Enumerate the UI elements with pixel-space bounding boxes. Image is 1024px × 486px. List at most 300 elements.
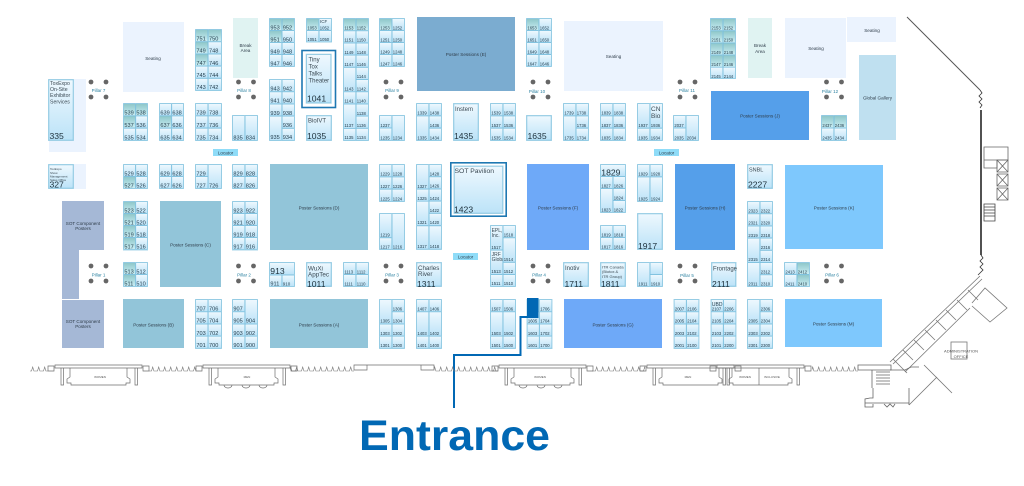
booth block 1153-1134: 1144 <box>357 74 366 79</box>
break area right: Break <box>754 43 767 48</box>
booth 2227 SNBL: SNBL <box>749 168 763 174</box>
poster sessions F: Poster Sessions (F) <box>538 206 579 210</box>
pillar 11 <box>678 80 697 99</box>
booth block 1605-1700 with highlighted booth <box>526 299 552 349</box>
booth block 923-916 <box>232 201 258 250</box>
booth block 2305-2300: 2304 <box>761 319 771 324</box>
booth block 1153-1134 <box>343 18 369 141</box>
booth block 1929-1924 <box>637 164 663 202</box>
booth block 913-910 <box>269 262 295 287</box>
poster sessions J <box>711 91 809 140</box>
booth block 523-516 <box>123 201 148 250</box>
booth block 539-534: 536 <box>136 123 146 129</box>
pillar 1 <box>89 264 108 283</box>
booth block 2323-2310: 2318 <box>761 233 771 238</box>
booth block 751-742: 750 <box>209 36 218 42</box>
women's restroom centre: WOMEN <box>534 375 546 379</box>
booth block 2153-2144 <box>710 18 736 79</box>
booth block 923-916: 918 <box>246 232 255 238</box>
booth block 2323-2310: 2316 <box>761 245 771 250</box>
booth block 1653-1646: 1652 <box>540 25 550 30</box>
booth 335 on-site exhibitor services <box>48 79 86 152</box>
booth block 1253-1246 <box>379 18 405 67</box>
poster sessions E <box>417 17 515 91</box>
poster sessions K: Poster Sessions (K) <box>814 206 855 210</box>
booth block 529-526: 528 <box>136 171 146 177</box>
pillar 1: Pillar 1 <box>92 272 106 278</box>
poster sessions D: Poster Sessions (D) <box>299 206 340 210</box>
booth block 923-916: 917 <box>233 244 243 250</box>
route arrow to entrance <box>454 317 528 408</box>
highlighted booth <box>527 298 538 318</box>
poster sessions H: Poster Sessions (H) <box>685 206 726 210</box>
booth block 1153-1134: 1150 <box>357 38 366 43</box>
booth block 1153-1134: 1136 <box>357 123 366 128</box>
booth block 1219-1216 <box>379 213 405 250</box>
booth block 1407-1400: 1406 <box>430 306 440 312</box>
pillar 10: Pillar 10 <box>529 89 546 94</box>
booth block 2437-2434: 2436 <box>835 123 845 128</box>
booth block 1237-1234: 1234 <box>393 135 403 140</box>
poster sessions E: Poster Sessions (E) <box>446 52 487 57</box>
diagonal offices <box>890 276 1007 405</box>
booth 1711 Inotiv: Inotiv <box>565 266 579 272</box>
booth block 1327-1418: 1420 <box>430 220 440 225</box>
booth block 523-516: 518 <box>136 232 146 238</box>
booth block 943-934: 936 <box>283 123 292 129</box>
booth block 1113-1110: 1110 <box>357 281 366 286</box>
booth block 751-742 <box>195 29 222 91</box>
booth block 1113-1110: 1112 <box>357 269 366 274</box>
break area left: Area <box>241 48 251 53</box>
booth block 523-516: 516 <box>136 244 146 250</box>
booth block 1911-1910: 1911 <box>638 281 648 286</box>
booth block EPL and JRF Global 1517-1510: EPL, <box>492 228 502 234</box>
booth block 2323-2310: 2323 <box>748 208 758 213</box>
booth block 953-946: 948 <box>283 49 292 55</box>
women's restroom centre <box>492 365 593 388</box>
booth block 2437-2434: 2434 <box>835 135 845 140</box>
booth block 523-516: 523 <box>124 208 134 214</box>
booth block 1937-1934 CN Bio: 1936 <box>651 123 661 128</box>
booth block 1507-1500: 1503 <box>491 331 501 336</box>
booth block 2107-2200: 2202 <box>724 331 734 336</box>
booth block 707-700: 707 <box>196 306 206 312</box>
booth block 1507-1500: 1500 <box>504 343 514 348</box>
booth block 739-734: 739 <box>196 111 206 117</box>
booth 2111 Frontage <box>711 262 738 289</box>
SOT component posters lower: SOT Component <box>66 319 101 324</box>
booth block 1229-1224: 1225 <box>380 196 390 201</box>
booth block 2107-2200: 2107 <box>712 306 722 312</box>
pillar 4 <box>531 264 550 283</box>
booth block 1153-1134: 1147 <box>344 62 354 67</box>
booth block 1653-1646 <box>526 18 552 67</box>
booth block 1153-1134: 1143 <box>344 86 354 91</box>
booth block 1739-1734: 1739 <box>564 111 574 116</box>
booth block 707-700 <box>195 299 222 349</box>
booth block 629-626: 628 <box>172 171 182 177</box>
pillar 6: Pillar 6 <box>825 272 839 278</box>
booth block 523-516: 519 <box>124 232 134 238</box>
poster sessions A: Poster Sessions (A) <box>299 322 340 328</box>
poster sessions G: Poster Sessions (G) <box>592 322 634 328</box>
booth block 1327-1418: 1418 <box>430 244 440 249</box>
booth block 1153-1134: 1141 <box>344 99 354 104</box>
booth block 2323-2310: 2310 <box>761 281 771 286</box>
booth block 1339-1434: 1434 <box>430 135 440 140</box>
booth block 1053-1050: ICF <box>320 19 328 24</box>
pillar 9 <box>384 80 403 99</box>
pillar 9: Pillar 9 <box>385 88 399 93</box>
booth block 1653-1646: 1646 <box>540 61 550 66</box>
booth 1917 <box>637 213 663 251</box>
booth block 513-510: 512 <box>136 269 146 275</box>
poster sessions M <box>785 299 882 347</box>
booth block 1153-1134: 1140 <box>357 99 366 104</box>
booth block 729-726: 727 <box>196 183 206 189</box>
booth block 751-742: 744 <box>209 73 218 79</box>
booth block 1605-1700 with highlighted booth: 1702 <box>540 331 550 336</box>
booth block 1307-1300: 1300 <box>393 343 403 348</box>
booth block 2107-2200: UBD <box>712 302 723 308</box>
booth block 1307-1300 <box>379 299 405 349</box>
booth 1811 ITR Canada: 1811 <box>601 279 620 289</box>
booth 1035 BioIVT <box>306 115 332 141</box>
booth 2111 Frontage: 2111 <box>712 279 730 289</box>
booth block 1605-1700 with highlighted booth: 1704 <box>540 319 550 324</box>
booth block 1539-1534: 1538 <box>504 111 514 116</box>
booth block 943-934: 943 <box>270 86 280 92</box>
booth block 2437-2434: 2437 <box>822 123 832 128</box>
booth block 923-916: 920 <box>246 220 255 226</box>
booth block 1407-1400 <box>416 299 442 349</box>
booth block 2413-2410: 2410 <box>798 281 808 286</box>
booth block 639-634 <box>159 103 184 141</box>
break area left: Break <box>239 43 252 48</box>
booth block 2153-2144: 2147 <box>711 62 721 67</box>
booth block 2323-2310: 2321 <box>748 221 758 226</box>
booth block 1911-1910: 1910 <box>651 281 661 286</box>
booth block 1253-1246: 1250 <box>393 37 403 42</box>
booth 1711 Inotiv: 1711 <box>564 279 583 289</box>
booth 335 on-site exhibitor services: ToxExpo <box>50 81 70 87</box>
booth block 2153-2144: 2144 <box>724 74 734 79</box>
booth block 913-910: 910 <box>283 281 291 286</box>
booth block 2323-2310: 2320 <box>761 221 771 226</box>
booth block 629-626: 627 <box>160 183 170 189</box>
booth block 1653-1646: 1647 <box>527 61 537 66</box>
booth block 2323-2310: 2319 <box>748 233 758 238</box>
booth block 1605-1700 with highlighted booth: 1603 <box>528 331 538 336</box>
booth block 943-934: 935 <box>270 135 280 141</box>
booth block 943-934: 942 <box>283 86 292 92</box>
booth block 1407-1400: 1407 <box>417 306 427 312</box>
booth block 2153-2144: 2152 <box>724 25 734 30</box>
booth block 639-634: 637 <box>160 123 170 129</box>
booth 2227 SNBL <box>747 164 773 190</box>
booth block 2007-2100: 2007 <box>675 306 685 312</box>
women's restroom left <box>48 365 149 385</box>
booth block EPL and JRF Global 1517-1510: Inc. <box>492 233 500 239</box>
booth block 2007-2100: 2003 <box>675 331 685 336</box>
booth block 1339-1434 <box>416 103 442 141</box>
booth block 907-900: 902 <box>246 331 255 337</box>
SOT Pavilion booth 1423: SOT Pavilion <box>454 168 494 175</box>
booth block 829-826 <box>232 164 258 189</box>
booth block 729-726: 726 <box>209 183 218 189</box>
booth 1435 Inotiv: 1435 <box>454 131 473 141</box>
booth block 1339-1434: 1335 <box>417 135 427 140</box>
booth block 2007-2100: 2005 <box>675 319 685 324</box>
booth block 953-946: 947 <box>270 61 280 67</box>
booth block 1307-1300: 1306 <box>393 306 403 312</box>
poster sessions J: Poster Sessions (J) <box>740 114 780 118</box>
booth block 707-700: 703 <box>196 331 206 337</box>
booth block 523-516: 521 <box>124 220 134 226</box>
booth block 923-916: 923 <box>233 208 243 214</box>
booth block 829-826: 826 <box>246 183 255 189</box>
men's restroom right: MEN <box>685 375 691 379</box>
booth block 2305-2300 <box>747 299 773 349</box>
booth block 1539-1534: 1539 <box>491 111 501 116</box>
booth block 751-742: 748 <box>209 49 218 55</box>
booth block 943-934: 934 <box>283 135 292 141</box>
break area right <box>748 18 772 78</box>
elevators and stairs <box>984 147 1008 221</box>
booth block 2007-2100: 2100 <box>687 343 697 348</box>
booth block 1229-1224: 1226 <box>393 184 403 189</box>
booth block 2037-2034: 2037 <box>674 123 684 128</box>
booth block 2153-2144: 2150 <box>724 38 734 43</box>
booth block 2413-2410: 2411 <box>785 281 795 286</box>
booth block 2107-2200: 2206 <box>724 306 734 312</box>
women's restroom left: WOMEN <box>94 375 106 379</box>
booth block 2153-2144: 2146 <box>724 62 734 67</box>
booth 1311 Charles River: 1311 <box>417 279 436 289</box>
booth block 1911-1910 <box>637 262 663 287</box>
booth block 1339-1434: 1436 <box>430 123 440 128</box>
booth block 539-534: 537 <box>124 123 134 129</box>
administration office <box>944 342 978 359</box>
seating area left <box>123 22 184 92</box>
booth block 829-826: 827 <box>233 183 243 189</box>
booth block 1229-1224: 1229 <box>380 172 390 177</box>
booth block 2107-2200: 2103 <box>712 331 722 336</box>
booth block 2153-2144: 2153 <box>711 25 721 30</box>
pillar 5 <box>678 264 697 283</box>
booth block 1253-1246: 1247 <box>380 61 390 66</box>
booth block 2037-2034: 2034 <box>687 135 697 140</box>
SOT component posters lower: Posters <box>75 324 91 329</box>
pillar 3: Pillar 3 <box>385 272 399 278</box>
booth block 1653-1646: 1651 <box>527 37 537 42</box>
SOT component posters upper: SOT Component <box>66 221 101 226</box>
SOT component posters lower <box>62 300 104 348</box>
booth 335 on-site exhibitor services: 335 <box>50 131 64 141</box>
booth block 629-626: 626 <box>172 183 182 189</box>
booth block 1929-1924: 1929 <box>638 172 648 177</box>
booth block 1653-1646: 1650 <box>540 37 550 42</box>
seating area left: Seating <box>145 56 161 61</box>
booth block 1407-1400: 1401 <box>417 343 427 348</box>
booth block 1929-1924: 1924 <box>651 196 661 201</box>
booth block 707-700: 705 <box>196 319 206 325</box>
booth block 639-634: 635 <box>160 135 170 141</box>
booth block 1937-1934 CN Bio: 1934 <box>651 135 661 140</box>
booth block 907-900 <box>232 299 258 349</box>
booth block 2107-2200 <box>710 299 736 349</box>
administration office: OFFICE <box>954 354 969 359</box>
booth block 1253-1246: 1252 <box>393 25 403 30</box>
booth block 1153-1134: 1151 <box>344 38 354 43</box>
booth 2227 SNBL: 2227 <box>748 180 767 190</box>
booth block 751-742: 747 <box>196 61 206 67</box>
booth block 1539-1534: 1534 <box>504 135 514 140</box>
booth 1011 WuXi AppTec: AppTec <box>308 272 329 278</box>
booth block EPL and JRF Global 1517-1510: 1518 <box>504 232 514 237</box>
pillar 3 <box>384 264 403 283</box>
booth block 1507-1500: 1502 <box>504 331 514 336</box>
booth block EPL and JRF Global 1517-1510: 1514 <box>504 257 514 262</box>
locator centre: Locator <box>458 254 474 259</box>
booth block 1153-1134: 1153 <box>344 25 354 30</box>
booth block 923-916: 919 <box>233 232 243 238</box>
booth block 2037-2034 <box>673 115 699 141</box>
seating area top right <box>847 17 896 42</box>
booth block 707-700: 700 <box>209 343 218 349</box>
booth block 1229-1224 <box>379 164 405 202</box>
booth 327 show management: 327 <box>50 180 64 190</box>
booth block 2153-2144: 2145 <box>711 74 721 79</box>
booth block 953-946: 953 <box>270 25 280 31</box>
booth block 729-726: 729 <box>196 171 206 177</box>
booth 335 on-site exhibitor services: Services <box>50 100 70 106</box>
booth block 943-934 <box>269 79 295 141</box>
booth block 1153-1134: 1149 <box>344 50 354 55</box>
booth block 539-534: 539 <box>124 111 134 117</box>
booth block 739-734: 734 <box>209 135 218 141</box>
booth block 1253-1246: 1248 <box>393 49 403 54</box>
poster sessions K <box>785 165 883 249</box>
booth 327 show management: Show <box>50 171 58 175</box>
booth block 1327-1418 <box>416 164 442 250</box>
booth block 1253-1246: 1253 <box>380 25 390 30</box>
booth 335 on-site exhibitor services: Exhibitor <box>50 93 70 99</box>
booth block 639-634: 638 <box>172 111 182 117</box>
booth block 1819-1816: 1819 <box>601 232 611 237</box>
booth block 2323-2310: 2314 <box>761 257 771 262</box>
booth block 1219-1216: 1217 <box>380 244 390 249</box>
booth block EPL and JRF Global 1517-1510: 1511 <box>491 281 501 286</box>
Tiny Tox Talks Theater booth 1041: Talks <box>308 72 322 78</box>
booth block 513-510: 511 <box>124 281 133 287</box>
booth block 2437-2434: 2435 <box>822 135 832 140</box>
booth block 1839-1834 <box>600 103 626 141</box>
booth block 943-934: 938 <box>283 111 292 117</box>
poster sessions M: Poster Sessions (M) <box>813 322 855 326</box>
booth block 1839-1834: 1839 <box>601 111 611 116</box>
booth block 751-742: 751 <box>196 36 206 42</box>
booth block 2153-2144: 2149 <box>711 50 721 55</box>
booth block 907-900: 903 <box>233 331 243 337</box>
booth 1311 Charles River: River <box>418 271 432 278</box>
booth block 2323-2310 <box>747 201 773 287</box>
booth block 529-526 <box>123 164 148 189</box>
booth block 1153-1134: 1148 <box>357 50 366 55</box>
pillar 5: Pillar 5 <box>680 273 694 278</box>
booth block 539-534: 534 <box>136 135 146 141</box>
booth block 1739-1734: 1734 <box>577 135 587 140</box>
booth block 2153-2144: 2151 <box>711 38 721 43</box>
booth block 835-834: 834 <box>246 135 255 141</box>
poster sessions G <box>564 299 662 348</box>
booth block 2107-2200: 2200 <box>724 343 734 348</box>
booth block 1253-1246: 1246 <box>393 61 403 66</box>
booth block 729-726 <box>195 164 222 189</box>
SOT Pavilion booth 1423: 1423 <box>454 205 473 215</box>
booth 327 show management <box>48 164 86 190</box>
SOT component posters upper: Posters <box>75 226 91 231</box>
pillar 12: Pillar 12 <box>822 89 839 94</box>
booth block 1605-1700 with highlighted booth: 1601 <box>528 343 538 348</box>
booth block 1153-1134: 1137 <box>344 123 354 128</box>
booth block 707-700: 706 <box>209 306 218 312</box>
booth block 539-534 <box>123 103 148 141</box>
booth block 1937-1934 CN Bio: CN <box>651 106 661 113</box>
locator top left <box>213 149 238 156</box>
seating area top right: Seating <box>864 28 880 33</box>
booth block 1539-1534: 1535 <box>491 135 501 140</box>
booth 1811 ITR Canada: ITR Canada <box>602 264 624 270</box>
women and inclusive restrooms: WOMEN <box>739 375 751 379</box>
booth 1011 WuXi AppTec: 1011 <box>307 279 326 289</box>
booth block 2107-2200: 2105 <box>712 319 722 324</box>
booth block 523-516: 522 <box>136 208 146 214</box>
booth block 1653-1646: 1653 <box>527 25 537 30</box>
booth block 1819-1816 <box>600 225 626 250</box>
seating area right: Seating <box>808 46 824 51</box>
booth block 1153-1134: 1134 <box>357 135 366 140</box>
booth block 751-742: 743 <box>196 85 206 91</box>
booth block 739-734: 737 <box>196 123 206 129</box>
booth block 1327-1418: 1422 <box>430 208 440 213</box>
pillar 2 <box>236 264 256 283</box>
poster sessions C: Poster Sessions (C) <box>170 242 211 248</box>
booth block 907-900: 900 <box>246 343 255 349</box>
booth block EPL and JRF Global 1517-1510: JRF <box>492 252 501 258</box>
north-east wall <box>907 17 980 90</box>
booth block 943-934: 940 <box>283 99 292 105</box>
booth block 1829-1822: 1824 <box>614 195 624 200</box>
booth block 2305-2300: 2302 <box>761 331 771 336</box>
booth block 2437-2434 <box>821 115 847 141</box>
women and inclusive restrooms <box>710 365 811 385</box>
booth block 1153-1134: 1142 <box>357 86 366 91</box>
Tiny Tox Talks Theater booth 1041: Tiny <box>308 58 320 64</box>
locator centre <box>453 253 478 260</box>
booth block 739-734: 735 <box>196 135 206 141</box>
booth block 739-734: 738 <box>209 111 218 117</box>
booth block 1237-1234 <box>379 115 405 141</box>
booth block 539-534: 535 <box>124 135 134 141</box>
booth block 1229-1224: 1228 <box>393 172 403 177</box>
booth block 1307-1300: 1301 <box>380 343 390 348</box>
booth block 1507-1500: 1506 <box>504 306 514 312</box>
booth block 2007-2100: 2106 <box>687 306 697 312</box>
pillar 11: Pillar 11 <box>679 88 695 93</box>
booth block 829-826: 829 <box>233 171 243 177</box>
